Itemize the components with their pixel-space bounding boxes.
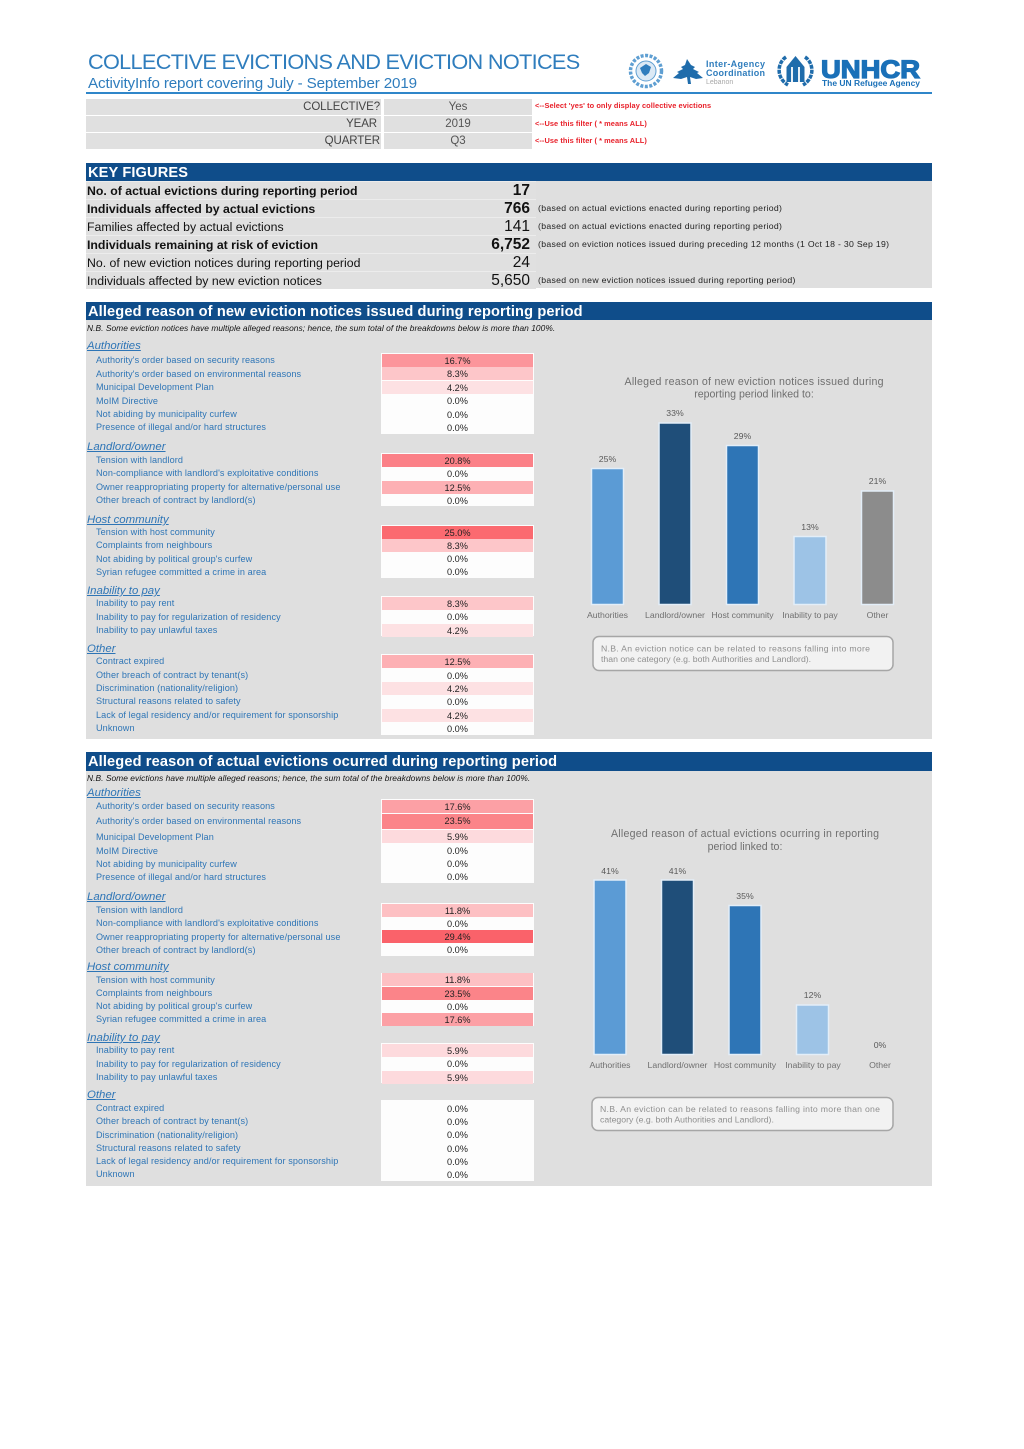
callout: category (e.g. both Authorities and Landlord). <box>600 1114 774 1124</box>
breakdown: authorities (evictions): 0.0% <box>447 872 468 882</box>
breakdown: host community (notices): 8.3% <box>447 541 468 551</box>
breakdown: authorities (notices): 0.0% <box>447 423 468 433</box>
callout: N.B. An eviction can be related to reasons falling into more than one <box>600 1104 880 1114</box>
key figures rows: 6,752 <box>491 236 530 253</box>
breakdown: other (evictions): 0.0% <box>447 1130 468 1140</box>
breakdown: other (notices): 0.0% <box>447 724 468 734</box>
breakdown: authorities (evictions): Authority's order based on environmental reasons <box>96 816 301 826</box>
breakdown: authorities (evictions): Authority's order based on security reasons <box>96 801 275 811</box>
breakdown: landlord (evictions): 11.8% <box>445 906 470 916</box>
breakdown: host community (evictions): 0.0% <box>447 1002 468 1012</box>
panel: actual evictions <box>86 752 932 1186</box>
breakdown: landlord (notices): Non-compliance with landlord's exploitative conditions <box>96 468 318 478</box>
breakdown: other (evictions): Other <box>87 1089 116 1101</box>
breakdown: other (notices): Lack of legal residency and/or requirement for sponsorship <box>96 710 338 720</box>
breakdown: inability to pay (evictions): 5.9% <box>447 1073 468 1083</box>
heading: key figures: KEY FIGURES <box>88 165 188 181</box>
breakdown: landlord (notices): Other breach of contract by landlord(s) <box>96 495 256 505</box>
breakdown: other (evictions): 0.0% <box>447 1117 468 1127</box>
breakdown: other (evictions): 0.0% <box>447 1170 468 1180</box>
key figures rows: No. of new eviction notices during reporting period <box>87 256 360 270</box>
value labels: 41% <box>669 866 686 876</box>
filters: QUARTER <box>325 135 380 147</box>
breakdown: other (notices): 4.2% <box>447 684 468 694</box>
breakdown: other (evictions): Contract expired <box>96 1103 164 1113</box>
key figures rows: No. of actual evictions during reporting period <box>87 184 358 198</box>
breakdown: host community (evictions): 23.5% <box>444 989 471 999</box>
key figures rows: (based on actual evictions enacted during reporting period) <box>538 221 782 231</box>
breakdown: authorities (notices): Authority's order based on environmental reasons <box>96 369 301 379</box>
breakdown: landlord (notices): 12.5% <box>444 483 471 493</box>
breakdown: landlord (evictions): Owner reappropriating property for alternative/personal use <box>96 932 340 942</box>
breakdown: landlord (evictions): 29.4% <box>444 932 471 942</box>
breakdown: host community (notices): Host community <box>87 514 169 526</box>
breakdown: host community (evictions): 17.6% <box>444 1015 471 1025</box>
value labels: 33% <box>666 408 684 418</box>
filters: <--Use this filter ( * means ALL) <box>535 119 647 128</box>
breakdown: inability to pay (notices): 0.0% <box>447 612 468 622</box>
breakdown: inability to pay (notices): Inability to pay unlawful taxes <box>96 625 217 635</box>
breakdown: other (notices): Discrimination (nationality/religion) <box>96 683 238 693</box>
category labels: Host community <box>714 1060 777 1070</box>
breakdown: authorities (evictions): Authorities <box>87 787 141 799</box>
breakdown: landlord (evictions): Landlord/owner <box>87 891 166 903</box>
filters <box>86 99 711 149</box>
panel: new eviction notices <box>86 302 932 739</box>
category labels: Inability to pay <box>785 1060 841 1070</box>
breakdown: authorities (notices): 4.2% <box>447 383 468 393</box>
category labels: Landlord/owner <box>645 610 705 620</box>
breakdown: other (notices): Structural reasons related to safety <box>96 696 241 706</box>
key figures rows: 5,650 <box>491 272 530 289</box>
category labels: Host community <box>711 610 774 620</box>
breakdown: landlord (evictions): 0.0% <box>447 945 468 955</box>
panel: key figures <box>86 163 932 288</box>
breakdown: inability to pay (notices): 8.3% <box>447 599 468 609</box>
breakdown: host community (notices): 25.0% <box>444 528 471 538</box>
breakdown: inability to pay (evictions): 0.0% <box>447 1059 468 1069</box>
breakdown: authorities (notices): Authority's order based on security reasons <box>96 355 275 365</box>
filters: 2019 <box>445 118 471 130</box>
breakdown: other (notices) <box>87 643 534 735</box>
header rule <box>86 92 932 94</box>
category labels: Authorities <box>589 1060 631 1070</box>
breakdown: host community (evictions): Complaints from neighbours <box>96 988 212 998</box>
breakdown: other (evictions): Discrimination (nationality/religion) <box>96 1130 238 1140</box>
breakdown: landlord (evictions): Non-compliance with landlord's exploitative conditions <box>96 918 318 928</box>
breakdown: other (evictions): Unknown <box>96 1169 135 1179</box>
breakdown: authorities (notices): Municipal Development Plan <box>96 382 214 392</box>
callout <box>592 1098 893 1130</box>
breakdown: landlord (notices): 20.8% <box>444 456 471 466</box>
subtitle: ActivityInfo report covering July - September 2019 <box>88 75 417 92</box>
bar chart: actual evictions <box>589 828 894 1132</box>
breakdown: host community (notices): Tension with host community <box>96 527 215 537</box>
filters: <--Use this filter ( * means ALL) <box>535 136 647 145</box>
filters: YEAR <box>346 118 377 130</box>
chart title <box>624 376 884 400</box>
UNHCR wordmark: The UN Refugee Agency <box>822 79 921 88</box>
breakdown: authorities (notices): Presence of illegal and/or hard structures <box>96 422 266 432</box>
breakdown: host community (notices): Not abiding by political group's curfew <box>96 554 252 564</box>
breakdown: other (notices): 4.2% <box>447 711 468 721</box>
category labels: Landlord/owner <box>648 1060 708 1070</box>
breakdown: landlord (notices): Tension with landlord <box>96 455 183 465</box>
breakdown: landlord (notices): Landlord/owner <box>87 441 166 453</box>
key figures rows: 17 <box>513 182 530 199</box>
chart title: Alleged reason of actual evictions ocurring in reporting <box>611 828 879 840</box>
breakdown: authorities (notices): Authorities <box>87 340 141 352</box>
breakdown: other (evictions): 0.0% <box>447 1104 468 1114</box>
key figures rows: (based on actual evictions enacted during reporting period) <box>538 203 782 213</box>
breakdown: other (evictions): 0.0% <box>447 1157 468 1167</box>
breakdown: authorities (notices): Not abiding by municipality curfew <box>96 409 237 419</box>
value labels <box>599 408 886 532</box>
category labels: Inability to pay <box>782 610 838 620</box>
callout: than one category (e.g. both Authorities and Landlord). <box>601 654 811 664</box>
bars <box>594 880 828 1054</box>
breakdown: host community (notices): Complaints from neighbours <box>96 540 212 550</box>
breakdown: inability to pay (evictions): Inability to pay rent <box>96 1045 174 1055</box>
inter-agency text: Lebanon <box>706 79 733 86</box>
breakdown: host community (evictions): Host community <box>87 961 169 973</box>
breakdown: other (evictions): Lack of legal residency and/or requirement for sponsorship <box>96 1156 338 1166</box>
value labels: 35% <box>736 891 754 901</box>
breakdown: authorities (evictions): MoIM Directive <box>96 846 158 856</box>
breakdown: authorities (notices): 0.0% <box>447 410 468 420</box>
breakdown: other (notices): 0.0% <box>447 671 468 681</box>
icon: cedar tree <box>673 59 703 84</box>
breakdown: host community (evictions): 11.8% <box>445 975 470 985</box>
breakdown: landlord (notices): 0.0% <box>447 496 468 506</box>
breakdown: authorities (evictions): 0.0% <box>447 859 468 869</box>
breakdown: authorities (notices) <box>86 340 534 434</box>
breakdown: authorities (notices): 0.0% <box>447 396 468 406</box>
breakdown: authorities (notices): 8.3% <box>447 369 468 379</box>
breakdown: inability to pay (notices) <box>87 585 534 637</box>
bar chart: new eviction notices <box>587 376 894 672</box>
breakdown: landlord (evictions): Other breach of contract by landlord(s) <box>96 945 256 955</box>
key figures rows: Individuals affected by actual evictions <box>87 202 315 216</box>
bars <box>592 423 894 604</box>
breakdown: landlord (notices): Owner reappropriating property for alternative/personal use <box>96 482 340 492</box>
key figures rows: (based on new eviction notices issued during reporting period) <box>538 275 796 285</box>
breakdown: other (evictions): Structural reasons related to safety <box>96 1143 241 1153</box>
breakdown: authorities (evictions): 0.0% <box>447 846 468 856</box>
breakdown: landlord (evictions): 0.0% <box>447 919 468 929</box>
value labels <box>601 866 887 1050</box>
breakdown: inability to pay (notices): Inability to pay rent <box>96 598 174 608</box>
breakdown: host community (notices): Syrian refugee committed a crime in area <box>96 567 266 577</box>
breakdown: landlord (notices): 0.0% <box>447 469 468 479</box>
breakdown: other (notices): Other breach of contract by tenant(s) <box>96 670 248 680</box>
filters: Yes <box>449 101 467 113</box>
breakdown: inability to pay (evictions): 5.9% <box>447 1046 468 1056</box>
value labels: 21% <box>869 476 886 486</box>
value labels: 41% <box>601 866 619 876</box>
breakdown: other (notices): 0.0% <box>447 697 468 707</box>
category labels: Authorities <box>587 610 629 620</box>
title: COLLECTIVE EVICTIONS AND EVICTION NOTICES <box>88 49 580 74</box>
breakdown: authorities (evictions): 23.5% <box>444 816 471 826</box>
icon: UNHCR emblem <box>779 56 812 85</box>
key figures rows: Individuals affected by new eviction notices <box>87 274 322 288</box>
key figures rows: Families affected by actual evictions <box>87 220 284 234</box>
breakdown: other (notices): Other <box>87 643 116 655</box>
breakdown: other (evictions): Other breach of contract by tenant(s) <box>96 1116 248 1126</box>
key figures rows: (based on eviction notices issued during preceding 12 months (1 Oct 18 - 30 Sep 19) <box>538 239 889 249</box>
breakdown: inability to pay (evictions) <box>87 1032 534 1084</box>
category labels <box>587 610 888 620</box>
heading: actual evictions <box>86 752 932 771</box>
category labels: Other <box>867 610 888 620</box>
filters: <--Select 'yes' to only display collective evictions <box>535 101 711 110</box>
breakdown: authorities (evictions): Municipal Development Plan <box>96 832 214 842</box>
value labels: 12% <box>804 990 821 1000</box>
UNHCR wordmark: UNHCR <box>821 56 920 84</box>
breakdown: inability to pay (notices): Inability to pay for regularization of residency <box>96 612 281 622</box>
key figures rows: 24 <box>513 254 530 271</box>
breakdown: authorities (evictions): Presence of illegal and/or hard structures <box>96 872 266 882</box>
category labels: Other <box>869 1060 891 1070</box>
breakdown: landlord (notices) <box>87 441 534 506</box>
breakdown: authorities (notices): MoIM Directive <box>96 396 158 406</box>
note: new eviction notices: N.B. Some eviction notices have multiple alleged reasons; hence, the sum total of the breakdowns below is more than 100%. <box>87 323 555 333</box>
heading: key figures <box>86 163 932 181</box>
heading: actual evictions: Alleged reason of actual evictions ocurred during reporting period <box>88 754 557 770</box>
breakdown: inability to pay (notices): Inability to pay <box>87 585 160 597</box>
category labels <box>589 1060 891 1070</box>
icon: UN emblem <box>630 56 662 86</box>
breakdown: host community (evictions) <box>87 961 534 1026</box>
breakdown: other (notices): Unknown <box>96 723 135 733</box>
key figures rows: 766 <box>504 200 530 217</box>
chart title: period linked to: <box>708 841 782 853</box>
logos <box>628 54 921 88</box>
key figures rows <box>86 181 889 289</box>
inter-agency text: Inter-Agency <box>706 59 765 69</box>
callout <box>593 636 893 670</box>
key figures rows: Individuals remaining at risk of eviction <box>87 238 318 252</box>
value labels: 0% <box>874 1040 887 1050</box>
heading: new eviction notices <box>86 302 932 320</box>
value labels: 29% <box>734 431 751 441</box>
chart title <box>611 828 879 853</box>
note: actual evictions: N.B. Some evictions have multiple alleged reasons; hence, the sum total of the breakdowns below is more than 100%. <box>87 773 530 783</box>
breakdown: host community (notices) <box>87 514 534 578</box>
inter-agency text <box>706 59 765 86</box>
key figures rows: 141 <box>504 218 530 235</box>
breakdown: authorities (evictions): 17.6% <box>444 802 471 812</box>
breakdown: inability to pay (evictions): Inability to pay <box>87 1032 160 1044</box>
breakdown: inability to pay (notices): 4.2% <box>447 626 468 636</box>
breakdown: other (notices): Contract expired <box>96 656 164 666</box>
filters: COLLECTIVE? <box>303 101 380 113</box>
chart title: Alleged reason of new eviction notices issued during <box>624 376 884 388</box>
breakdown: landlord (evictions): Tension with landlord <box>96 905 183 915</box>
breakdown: host community (evictions): Tension with host community <box>96 975 215 985</box>
inter-agency text: Coordination <box>706 68 765 78</box>
heading: new eviction notices: Alleged reason of new eviction notices issued during reporting period <box>88 304 583 320</box>
breakdown: other (evictions): 0.0% <box>447 1144 468 1154</box>
breakdown: other (notices): 12.5% <box>444 657 471 667</box>
breakdown: authorities (evictions): Not abiding by municipality curfew <box>96 859 237 869</box>
breakdown: landlord (evictions) <box>87 891 534 956</box>
breakdown: inability to pay (evictions): Inability to pay for regularization of residency <box>96 1059 281 1069</box>
breakdown: host community (evictions): Syrian refugee committed a crime in area <box>96 1014 266 1024</box>
breakdown: inability to pay (evictions): Inability to pay unlawful taxes <box>96 1072 217 1082</box>
breakdown: host community (notices): 0.0% <box>447 554 468 564</box>
breakdown: authorities (notices): 16.7% <box>444 356 471 366</box>
callout: N.B. An eviction notice can be related to reasons falling into more <box>601 644 870 654</box>
breakdown: other (evictions) <box>87 1089 534 1181</box>
chart title: reporting period linked to: <box>694 388 814 400</box>
value labels: 25% <box>599 454 616 464</box>
filters: Q3 <box>450 135 466 147</box>
breakdown: authorities (evictions) <box>86 787 534 883</box>
value labels: 13% <box>801 522 819 532</box>
breakdown: authorities (evictions): 5.9% <box>447 832 468 842</box>
breakdown: host community (evictions): Not abiding by political group's curfew <box>96 1001 252 1011</box>
breakdown: host community (notices): 0.0% <box>447 567 468 577</box>
